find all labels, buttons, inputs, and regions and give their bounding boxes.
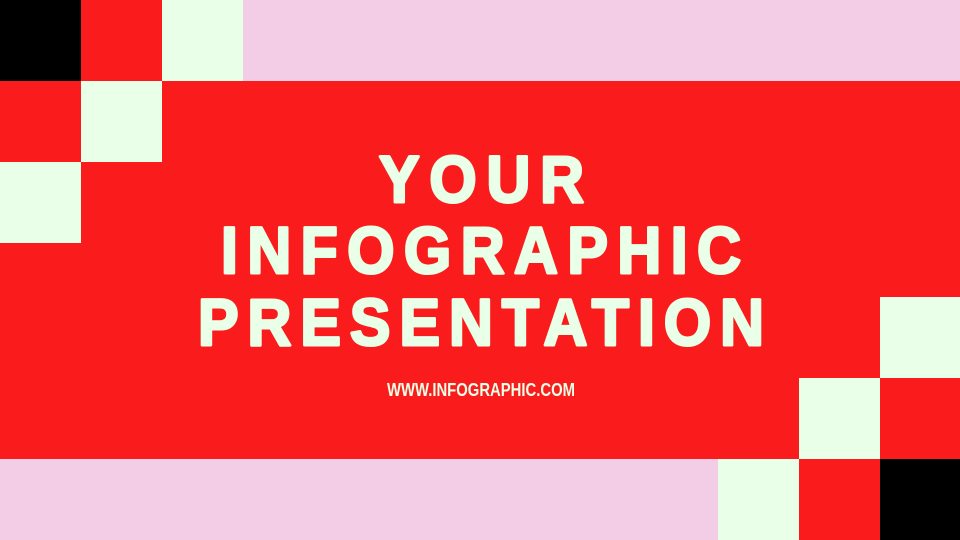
website url: WWW.INFOGRAPHIC.COM: [387, 380, 575, 400]
top pink band: [243, 0, 960, 81]
bottom pink band: [0, 459, 718, 540]
title: PRESENTATION: [198, 287, 764, 360]
title: [198, 144, 764, 360]
bottom-right checker blocks: [718, 297, 960, 540]
top-left checker blocks: [0, 0, 243, 243]
title: INFOGRAPHIC: [221, 215, 741, 288]
title: YOUR: [379, 144, 584, 217]
red central band: [0, 81, 960, 459]
